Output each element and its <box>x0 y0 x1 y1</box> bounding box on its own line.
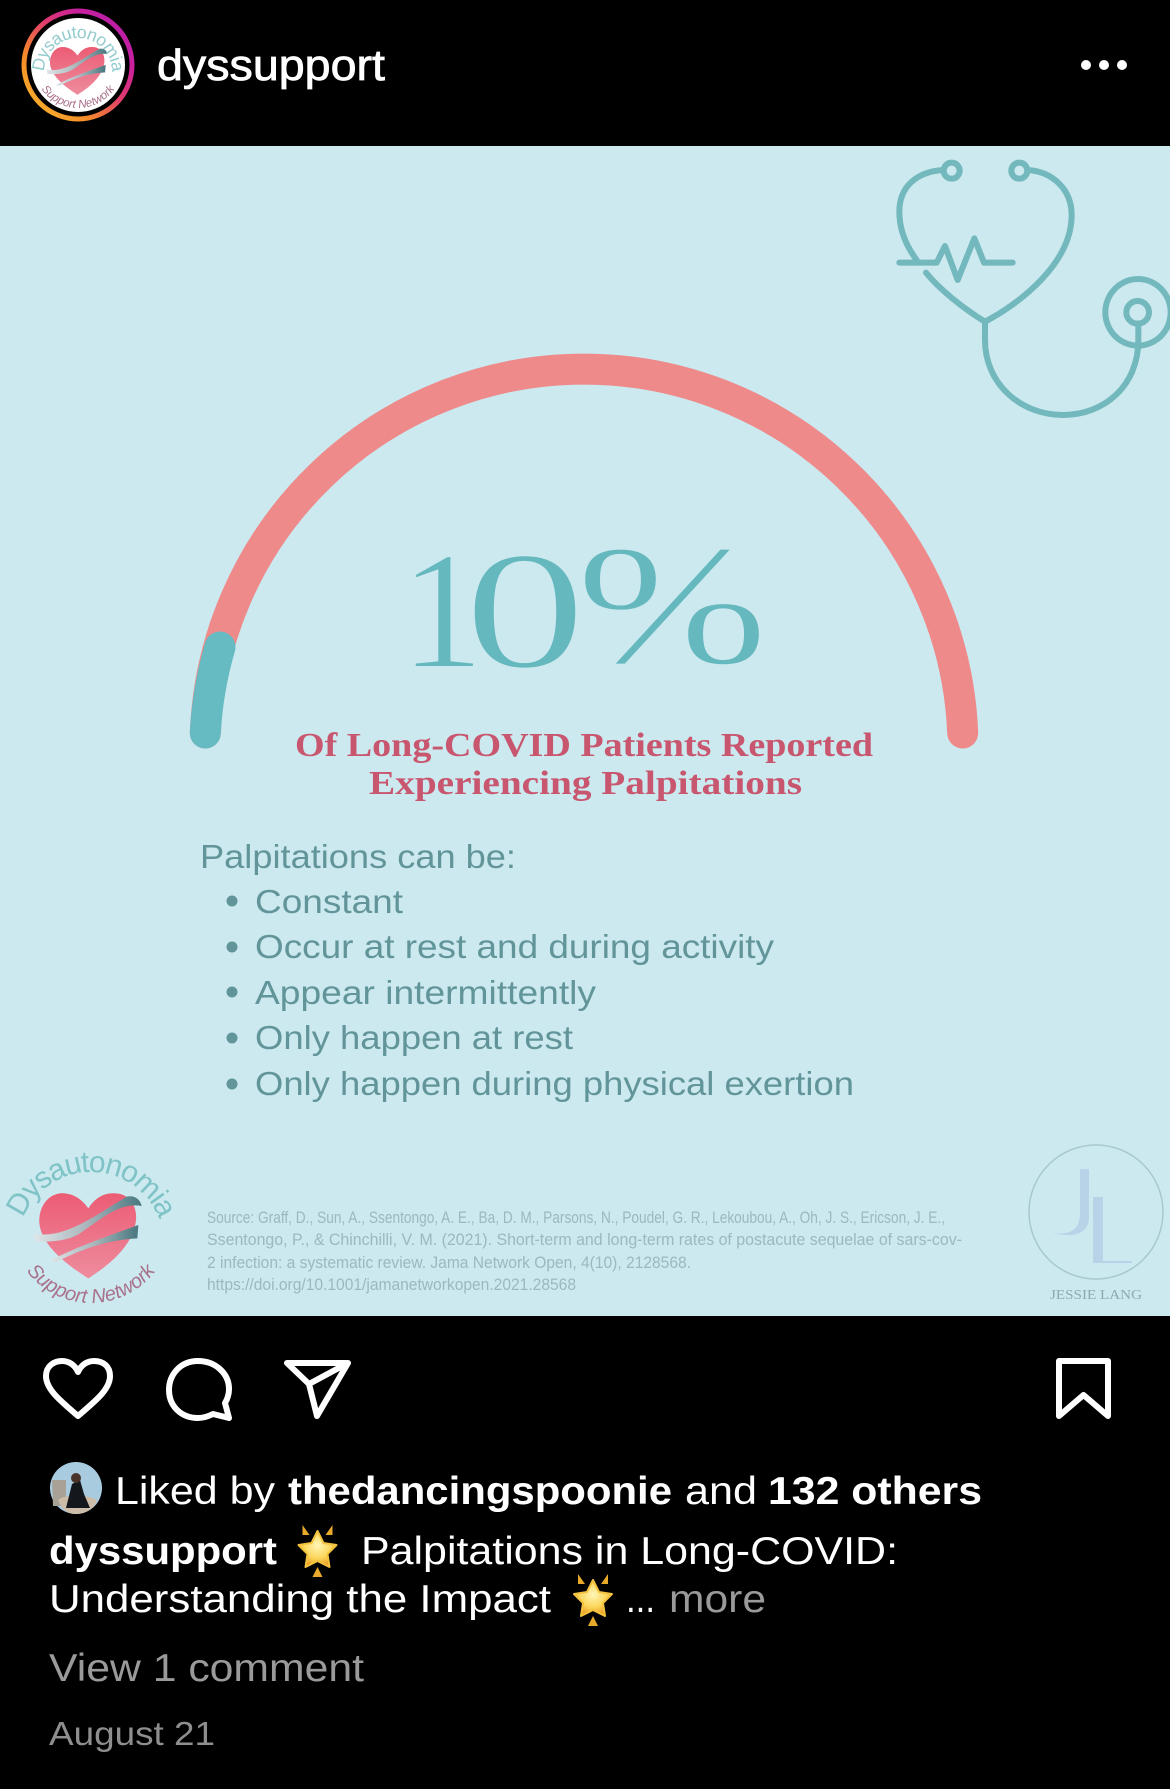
liked by text: and <box>685 1470 757 1513</box>
logo: jessie lang: JESSIE LANG <box>1050 1288 1142 1303</box>
caption <box>49 1525 898 1626</box>
logo: dysautonomia support network <box>6 1152 172 1304</box>
liked by text: thedancingspoonie <box>288 1470 672 1513</box>
icon: star emoji <box>298 1525 336 1577</box>
gauge arc chart <box>205 369 963 733</box>
caption: more <box>669 1578 766 1621</box>
logo: dysautonomia support network: Support Network <box>28 1264 155 1304</box>
source citation: Source: Graff, D., Sun, A., Ssentongo, A. E., Ba, D. M., Parsons, N., Poudel, G. R., Lekoubou, A., Oh, J. S., Ericson, J. E., <box>207 1209 945 1227</box>
palpitations list: Only happen at rest <box>255 1019 573 1056</box>
icon: star emoji <box>574 1574 612 1626</box>
view comments link: View 1 comment <box>49 1647 364 1690</box>
palpitations list <box>200 838 854 1102</box>
icon: send <box>287 1363 348 1416</box>
username: dyssupport <box>157 41 385 90</box>
source citation: Ssentongo, P., & Chinchilli, V. M. (2021). Short-term and long-term rates of postacute sequelae of sars-cov- <box>207 1231 962 1249</box>
caption: Palpitations in Long-COVID: <box>361 1530 898 1573</box>
header bar <box>22 8 1127 122</box>
logo: dysautonomia support network: Dysautonomia <box>6 1152 172 1220</box>
liked by text: 132 others <box>768 1470 982 1513</box>
infographic panel <box>0 146 1170 1316</box>
logo: jessie lang <box>1029 1145 1163 1303</box>
subtitle: Experiencing Palpitations <box>369 765 802 802</box>
more options dots <box>1081 60 1127 70</box>
source citation: 2 infection: a systematic review. Jama Network Open, 4(10), 2128568. <box>207 1254 691 1272</box>
subtitle <box>295 727 873 802</box>
big percentage: 0 <box>464 518 586 704</box>
big percentage: % <box>576 511 768 701</box>
liker avatar <box>50 1462 102 1514</box>
profile avatar: Dysautonomia <box>32 26 122 72</box>
caption: ... <box>626 1578 655 1621</box>
palpitations list: Appear intermittently <box>255 974 597 1011</box>
source citation <box>207 1209 962 1294</box>
profile avatar: Support Network <box>42 85 114 108</box>
icon: stethoscope <box>899 163 1170 415</box>
post date: August 21 <box>49 1715 215 1752</box>
icon: bookmark <box>1059 1361 1108 1416</box>
big percentage: 1 <box>400 518 484 704</box>
icon: like heart <box>46 1361 110 1416</box>
palpitations list: Only happen during physical exertion <box>255 1065 854 1102</box>
liked by row <box>50 1462 982 1514</box>
liked by text <box>115 1470 982 1513</box>
palpitations list: Palpitations can be: <box>200 838 516 875</box>
source citation: https://doi.org/10.1001/jamanetworkopen.2021.28568 <box>207 1276 576 1294</box>
subtitle: Of Long-COVID Patients Reported <box>295 727 873 764</box>
action bar <box>46 1361 1108 1418</box>
palpitations list: Occur at rest and during activity <box>255 928 775 965</box>
icon: comment bubble <box>169 1361 229 1418</box>
profile avatar <box>22 8 134 122</box>
caption: Understanding the Impact <box>49 1578 551 1621</box>
caption: dyssupport <box>49 1530 277 1573</box>
liked by text: Liked by <box>115 1470 276 1513</box>
palpitations list: Constant <box>255 883 403 920</box>
